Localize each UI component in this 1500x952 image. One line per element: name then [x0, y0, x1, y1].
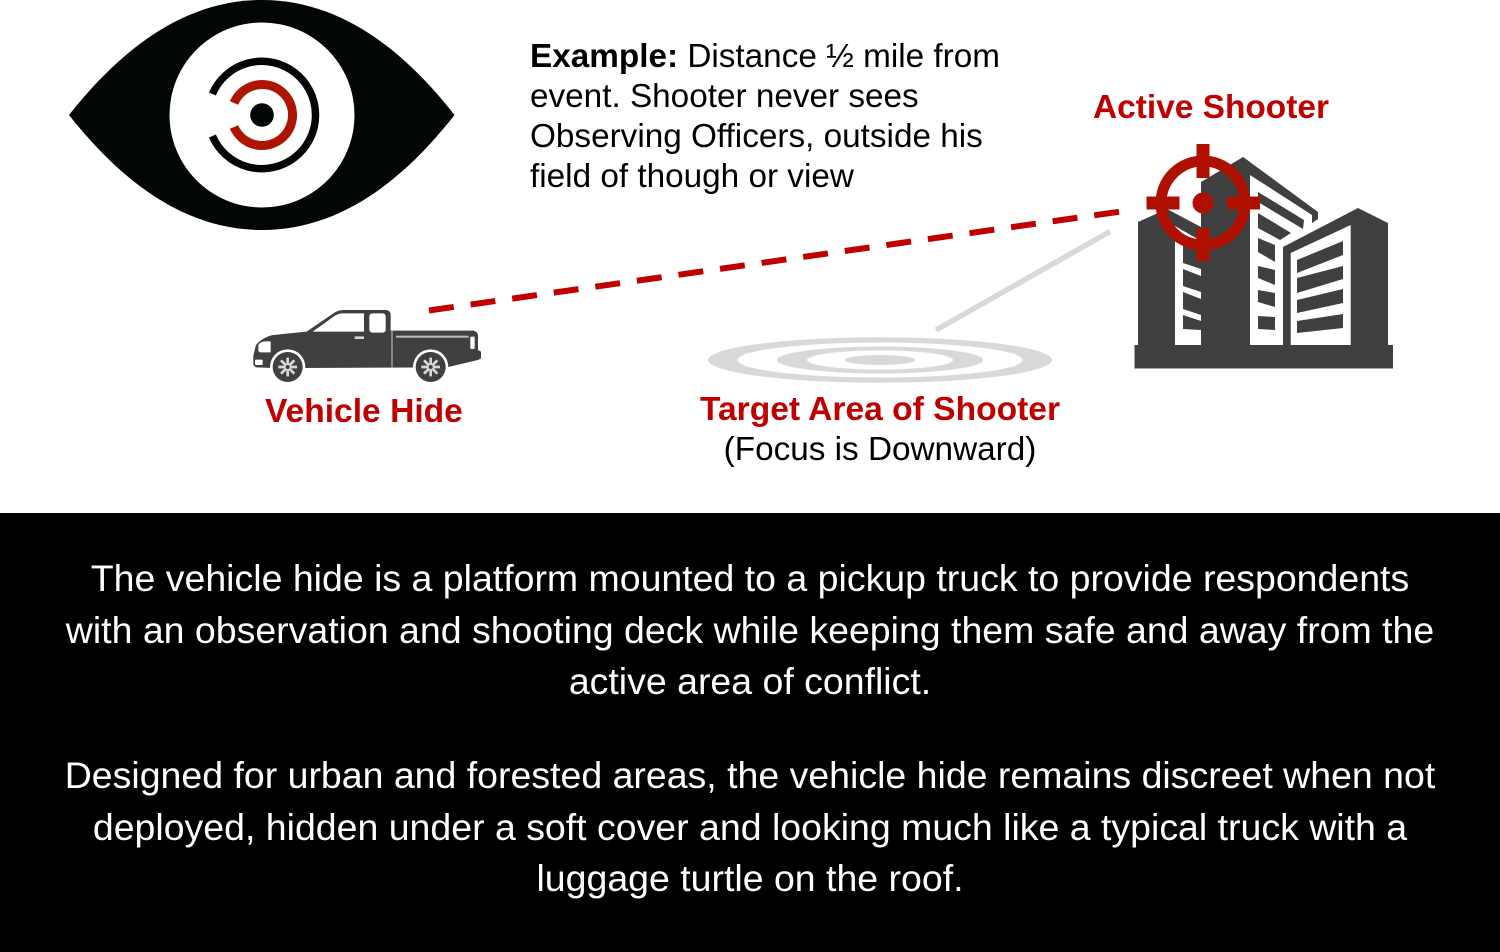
text: first paragraph: active area of conflict. — [569, 660, 931, 702]
text: example note: Example: Distance ½ mile from — [530, 38, 1000, 75]
text: example note: event. Shooter never sees — [530, 78, 919, 115]
shooter focus line — [936, 232, 1110, 330]
text: example note: field of though or view — [530, 158, 854, 195]
label: active shooter: Active Shooter — [1093, 89, 1329, 126]
text: second paragraph: luggage turtle on the roof. — [536, 857, 964, 899]
text: first paragraph: with an observation and shooting deck while keeping them safe and away from the — [66, 609, 1434, 651]
panel: description — [0, 513, 1500, 952]
icon: crosshair — [1146, 144, 1260, 261]
icon: eye with target — [69, 0, 454, 230]
text: second paragraph: Designed for urban and forested areas, the vehicle hide remains discreet when not — [65, 754, 1435, 796]
label: vehicle hide: Vehicle Hide — [265, 393, 463, 430]
text: example note: Observing Officers, outside his — [530, 118, 983, 155]
label: target area of shooter: Target Area of Shooter — [700, 390, 1060, 428]
icon: pickup truck — [253, 310, 481, 385]
label: target area of shooter — [700, 390, 1060, 468]
text: example note — [530, 38, 1000, 195]
icon: building with crosshair — [1134, 144, 1393, 368]
text: second paragraph: deployed, hidden under a soft cover and looking much like a typical truck with a — [93, 806, 1407, 848]
icon: target area rings — [708, 337, 1052, 383]
text: second paragraph — [65, 754, 1435, 899]
line of sight dashed — [429, 212, 1121, 310]
text: first paragraph: The vehicle hide is a platform mounted to a pickup truck to provide respondents — [91, 557, 1409, 599]
label: target area of shooter: (Focus is Downward) — [724, 430, 1036, 468]
text: first paragraph — [66, 557, 1434, 702]
diagram graphics — [69, 0, 1393, 383]
